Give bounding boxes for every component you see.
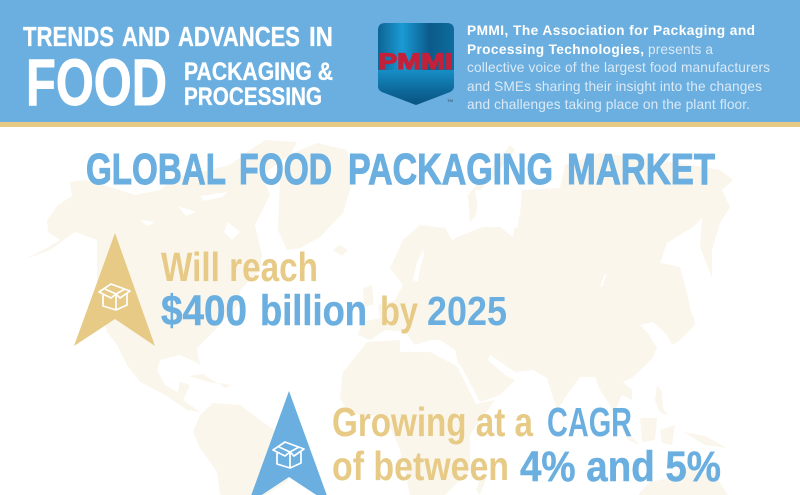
header title: IN: [309, 21, 333, 52]
stat: CAGR between 4% and 5%: Growing at a: [332, 399, 534, 445]
novaya zemlya: [468, 145, 515, 222]
main heading: MARKET: [567, 145, 715, 194]
header title: ADVANCES: [178, 21, 300, 52]
main heading: [86, 145, 715, 194]
PMMI logo: TM: [447, 98, 453, 103]
arrow icon: blue with box: [248, 391, 330, 495]
cuba and caribbean: [188, 374, 232, 388]
greenland: [278, 143, 353, 250]
japan: [673, 315, 695, 345]
eurasia: [358, 153, 733, 415]
stat: CAGR between 4% and 5%: CAGR: [547, 399, 632, 445]
world map background: [23, 140, 733, 495]
stat: CAGR between 4% and 5%: [332, 399, 721, 491]
header description: and SMEs sharing their insight into the changes: [467, 79, 762, 94]
south america: [193, 403, 295, 495]
PMMI logo: [378, 23, 454, 105]
stat: will reach $400 billion: $400: [161, 287, 247, 335]
header title: PROCESSING: [184, 83, 322, 111]
PMMI logo: PMMI: [378, 49, 453, 74]
main heading: FOOD: [239, 145, 332, 194]
header description: [467, 23, 770, 112]
header description: presents a: [648, 42, 713, 57]
header band: [0, 0, 800, 127]
iceland: [333, 245, 348, 256]
british isles: [363, 285, 374, 306]
map water details: [140, 190, 606, 402]
header title: TRENDS: [23, 21, 114, 52]
header description: collective voice of the largest food manufacturers: [467, 60, 770, 75]
stat: CAGR between 4% and 5%: of between: [332, 443, 509, 489]
main heading: PACKAGING: [348, 145, 553, 194]
header description: PMMI, The Association for Packaging and: [467, 23, 755, 38]
stat: will reach $400 billion: billion: [260, 287, 367, 335]
stat: will reach $400 billion: Will reach: [161, 244, 318, 290]
australia: [638, 465, 728, 495]
arrow icon: gold with box: [74, 233, 155, 346]
header description: and challenges taking place on the plant floor.: [467, 97, 750, 112]
header title: AND: [122, 21, 170, 52]
header description: Processing Technologies,: [467, 42, 644, 57]
africa: [340, 340, 495, 495]
southeast asia islands: [620, 385, 727, 448]
header title: PACKAGING &: [184, 58, 333, 86]
stat: CAGR between 4% and 5%: 4% and 5%: [520, 443, 721, 491]
header title: [23, 21, 333, 119]
stat: will reach $400 billion: [161, 244, 507, 335]
stat: will reach $400 billion: 2025: [427, 288, 507, 334]
north america: [23, 140, 297, 412]
header title: FOOD: [26, 45, 167, 119]
madagascar: [476, 475, 487, 495]
stat: will reach $400 billion: by: [380, 288, 418, 334]
main heading: GLOBAL: [86, 145, 226, 194]
